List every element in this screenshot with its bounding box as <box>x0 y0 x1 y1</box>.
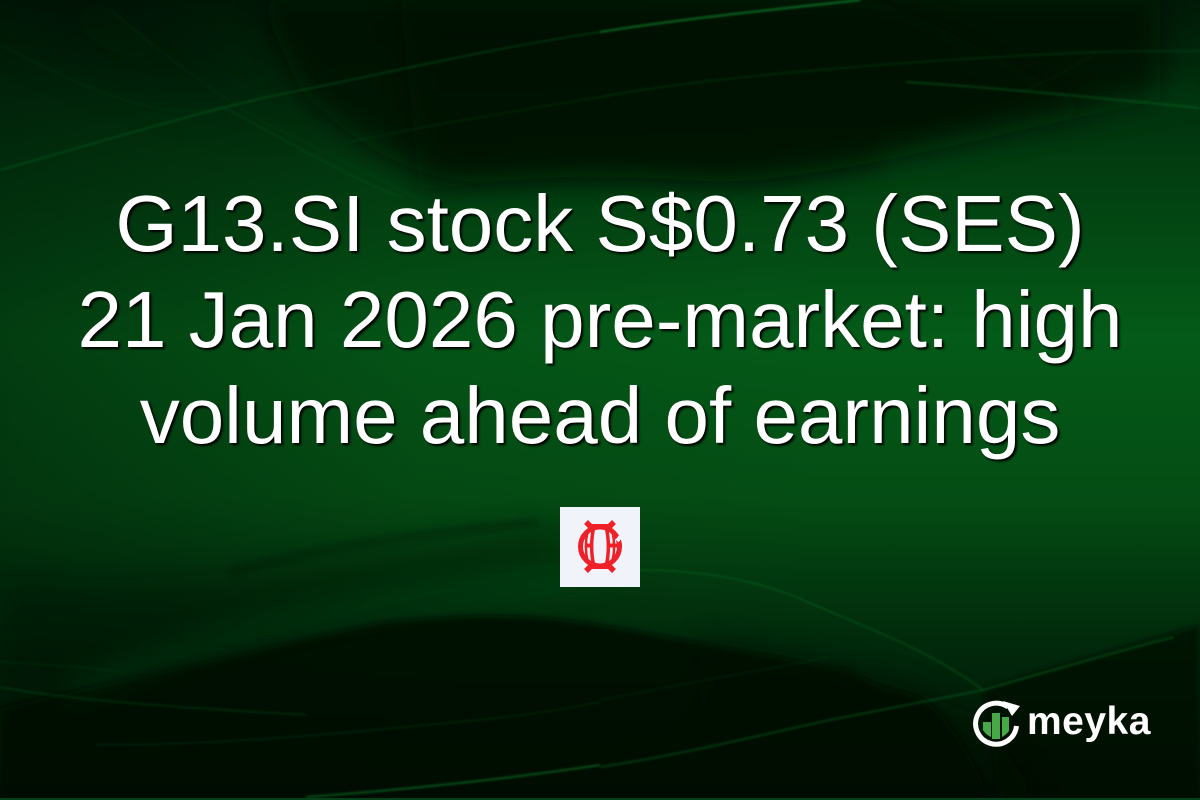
icon: meyka chart arrow <box>973 700 1020 747</box>
lower dark wave <box>0 616 990 800</box>
logo: meyka <box>973 700 1151 747</box>
title: 21 Jan 2026 pre-market: high <box>77 275 1123 364</box>
icon: company logo <box>560 507 640 587</box>
title: G13.SI stock S$0.73 (SES) <box>115 179 1085 268</box>
lower right fade <box>983 625 1200 800</box>
title: volume ahead of earnings <box>140 371 1060 460</box>
brand name: meyka <box>1027 700 1151 743</box>
upper left dark <box>0 0 300 110</box>
upper dark wave <box>260 0 1160 182</box>
title <box>77 179 1123 463</box>
